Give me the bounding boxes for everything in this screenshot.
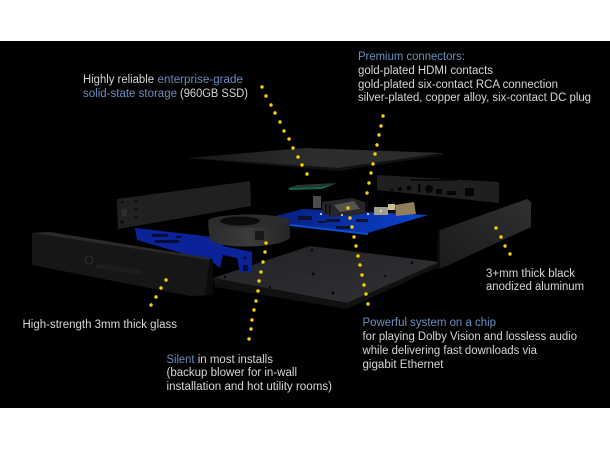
text: silent: installation and hot utility rooms) [166, 381, 332, 393]
text: silent: Silent [166, 354, 195, 366]
left side wall [117, 181, 251, 229]
text: system on a chip [362, 317, 577, 371]
base plate [213, 246, 440, 309]
text: glass: High-strength 3mm thick glass [22, 319, 177, 331]
blower fan [208, 214, 290, 247]
text: premium connectors: Premium connectors: [358, 51, 465, 63]
circuit board with components [275, 196, 428, 235]
text: enterprise-grade storage: solid-state storage [83, 88, 177, 100]
text: premium connectors: gold-plated HDMI contacts [358, 65, 493, 77]
text: system on a chip: while delivering fast downloads via [362, 345, 538, 357]
dotted leader: SSD [260, 85, 309, 176]
right side wall [437, 199, 531, 270]
text: aluminum: anodized aluminum [486, 281, 584, 293]
text: enterprise-grade storage: Highly reliable [83, 74, 154, 86]
text: aluminum: 3+mm thick black [486, 268, 575, 280]
text: enterprise-grade storage [83, 74, 248, 100]
text: silent: (backup blower for in-wall [166, 367, 297, 379]
text: system on a chip: for playing Dolby Vision and lossless audio [362, 331, 577, 343]
text: premium connectors: gold-plated six-contact RCA connection [358, 79, 558, 91]
leader dots [149, 85, 512, 341]
text: enterprise-grade storage: (960GB SSD) [180, 88, 248, 100]
dotted leader: aluminum [494, 226, 512, 256]
text: enterprise-grade storage: enterprise-grade [158, 74, 243, 86]
front glass panel with logo: kaleidescape [96, 261, 143, 276]
back connector panel [377, 175, 499, 203]
dotted leader: glass [149, 278, 168, 307]
exploded product illustration [32, 148, 531, 309]
text: silent [166, 354, 332, 393]
front glass panel with logo [32, 232, 213, 296]
dotted leader: silent fan [247, 241, 268, 341]
text: system on a chip: gigabit Ethernet [362, 359, 444, 371]
SSD module [288, 183, 337, 190]
blue bracket [135, 228, 252, 272]
dotted leader: system on a chip [346, 206, 370, 306]
dotted leader: connectors [365, 114, 385, 195]
text: premium connectors: silver-plated, copper alloy, six-contact DC plug [358, 92, 591, 104]
text: silent: in most installs [198, 354, 273, 366]
top cover plate [186, 148, 443, 171]
text: aluminum [486, 268, 584, 293]
text: premium connectors [358, 51, 591, 104]
text: system on a chip: Powerful system on a chip [362, 317, 496, 329]
